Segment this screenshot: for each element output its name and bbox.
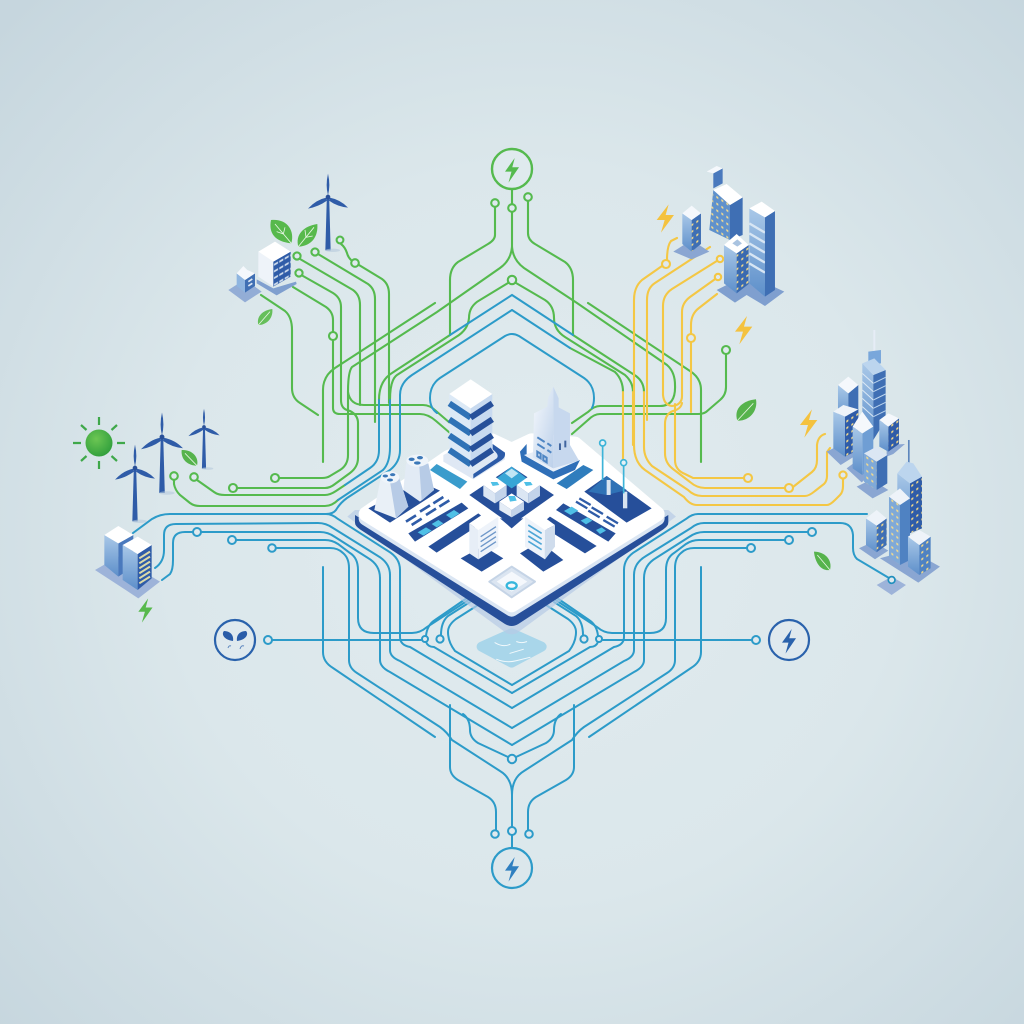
antenna pad (584, 440, 652, 523)
base plates (673, 240, 784, 306)
gothic tower building (520, 387, 580, 479)
lower-right office block (520, 511, 563, 572)
skyscraper (862, 330, 886, 440)
roads and center cross (428, 467, 597, 553)
icon: top green power node (492, 149, 532, 189)
left block (833, 405, 858, 457)
top-right city cluster (657, 166, 784, 421)
front block (864, 447, 887, 490)
server tower (443, 379, 505, 479)
circuit lines: center horizontal and bottom trunk (272, 635, 752, 848)
small building (237, 266, 255, 293)
icon: wind turbine 2 (141, 412, 183, 495)
rear annex (707, 166, 723, 188)
circuit lines: blue right horizontals (624, 514, 889, 578)
left control panel (406, 497, 468, 542)
yellow bolt 2 (735, 316, 752, 344)
center pale block (853, 412, 873, 475)
icon: top wind turbine (308, 174, 348, 252)
yellow bolt (800, 409, 817, 438)
platform port socket (489, 567, 535, 597)
green leaf (736, 399, 756, 421)
circuit lines: green upper network (174, 189, 726, 506)
front tower B (724, 234, 749, 293)
rear tower (838, 377, 858, 423)
green leaf (814, 552, 831, 570)
icon: wind turbine 1 (115, 445, 155, 523)
yellow bolt (657, 204, 674, 233)
right control panel (556, 498, 618, 542)
small tower (682, 206, 701, 252)
tall tower C (749, 202, 775, 297)
icon: sun (73, 417, 125, 469)
top-left green buildings and leaves (228, 220, 317, 325)
circuit lines: blue upper diamonds (133, 295, 594, 533)
mid block (889, 488, 910, 565)
left data center with leaf and bolt (95, 450, 197, 623)
base plates (228, 279, 297, 302)
lower-left office block (461, 511, 503, 572)
right city cluster (800, 330, 940, 595)
leaf (182, 450, 197, 466)
connector nodes (170, 193, 847, 838)
water tile beneath platform (482, 633, 542, 663)
cooling towers (368, 455, 440, 523)
platform base (347, 441, 676, 634)
central isometric platform (347, 379, 676, 634)
icon: right power badge (769, 620, 809, 660)
tower A (709, 184, 743, 240)
large office building (258, 242, 291, 287)
central data cubes (483, 467, 540, 517)
small front block (908, 530, 931, 575)
mid right block (879, 413, 899, 452)
teal strips (430, 464, 593, 489)
node on small plate (888, 577, 895, 583)
base plates (827, 444, 940, 595)
server building 2 (123, 537, 152, 590)
icon: wind turbine 3 (188, 409, 220, 470)
circuit lines: blue lower network right (512, 567, 701, 830)
circuit lines: yellow right network (623, 238, 843, 505)
icon: eco leaves badge (215, 620, 255, 660)
circuit lines: blue left horizontals (155, 514, 400, 580)
icon: green bolt (138, 598, 153, 623)
base plate (95, 557, 160, 598)
circuit lines: blue lower network left (323, 567, 512, 830)
spire block (897, 440, 922, 533)
icon: leaves (258, 220, 317, 325)
small left block (866, 510, 887, 552)
server building 1 (104, 526, 133, 577)
icon: bottom blue power node (492, 848, 532, 888)
